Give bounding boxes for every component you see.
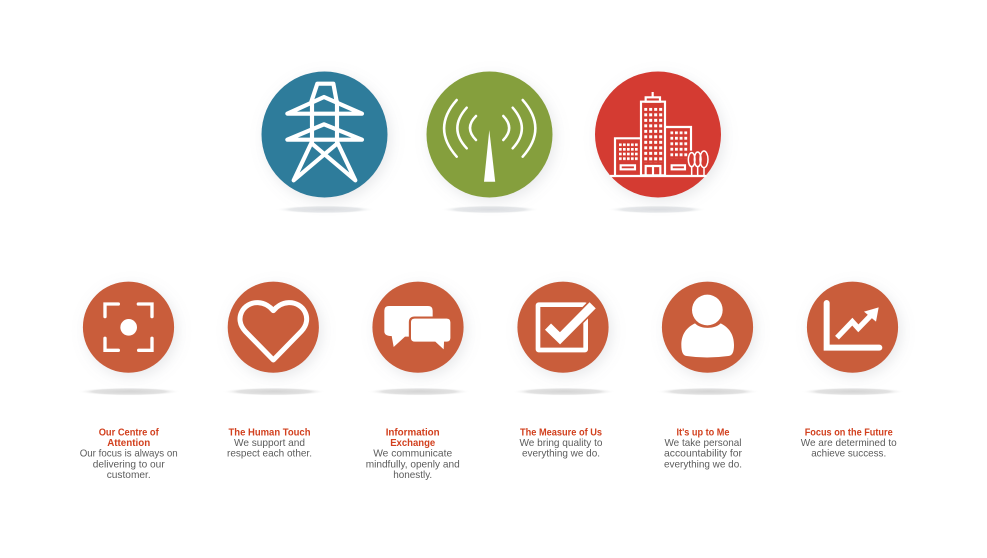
text: Our Centre of Attention: delivering to our [93,459,165,470]
text: It's up to Me: It's up to Me [676,427,730,438]
text: Our Centre of Attention: customer. [107,470,151,481]
text: Our Centre of Attention: Attention [107,438,150,449]
text: The Human Touch: respect each other. [227,449,312,460]
icon: person [656,282,760,396]
text: Focus on the Future: Focus on the Future [805,427,893,438]
text: The Human Touch: We support and [234,438,305,449]
text: It's up to Me: We take personal [664,438,742,449]
text: Information Exchange: Information [386,427,440,438]
text: Our Centre of Attention [80,427,178,481]
icon: checkbox with tick [512,282,616,396]
text: The Measure of Us [520,427,603,460]
icon: speech bubbles [367,282,471,396]
icon: heart [222,282,326,396]
text: The Measure of Us: We bring quality to [520,438,603,449]
text: The Measure of Us: everything we do. [522,449,600,460]
icon: radio antenna [426,72,552,214]
text: Information Exchange: honestly. [393,470,432,481]
text: Our Centre of Attention: Our focus is always on [80,449,178,460]
text: Focus on the Future: We are determined to [801,438,897,449]
icon: focus target [77,282,181,396]
text: The Human Touch: The Human Touch [228,427,310,438]
text: Information Exchange: We communicate [373,449,452,460]
text: It's up to Me [664,427,743,470]
icon: transmission tower [262,72,388,214]
text: Our Centre of Attention: Our Centre of [99,427,159,438]
text: It's up to Me: everything we do. [664,459,742,470]
text: Information Exchange: Exchange [390,438,435,449]
text: Focus on the Future [801,427,897,460]
text: Focus on the Future: achieve success. [811,449,886,460]
text: Information Exchange [366,427,460,481]
text: The Measure of Us: The Measure of Us [520,427,602,438]
text: It's up to Me: accountability for [664,449,743,460]
text: The Human Touch [227,427,312,460]
icon: rising line chart [801,282,905,396]
icon: city buildings [595,72,721,214]
text: Information Exchange: mindfully, openly and [366,459,460,470]
